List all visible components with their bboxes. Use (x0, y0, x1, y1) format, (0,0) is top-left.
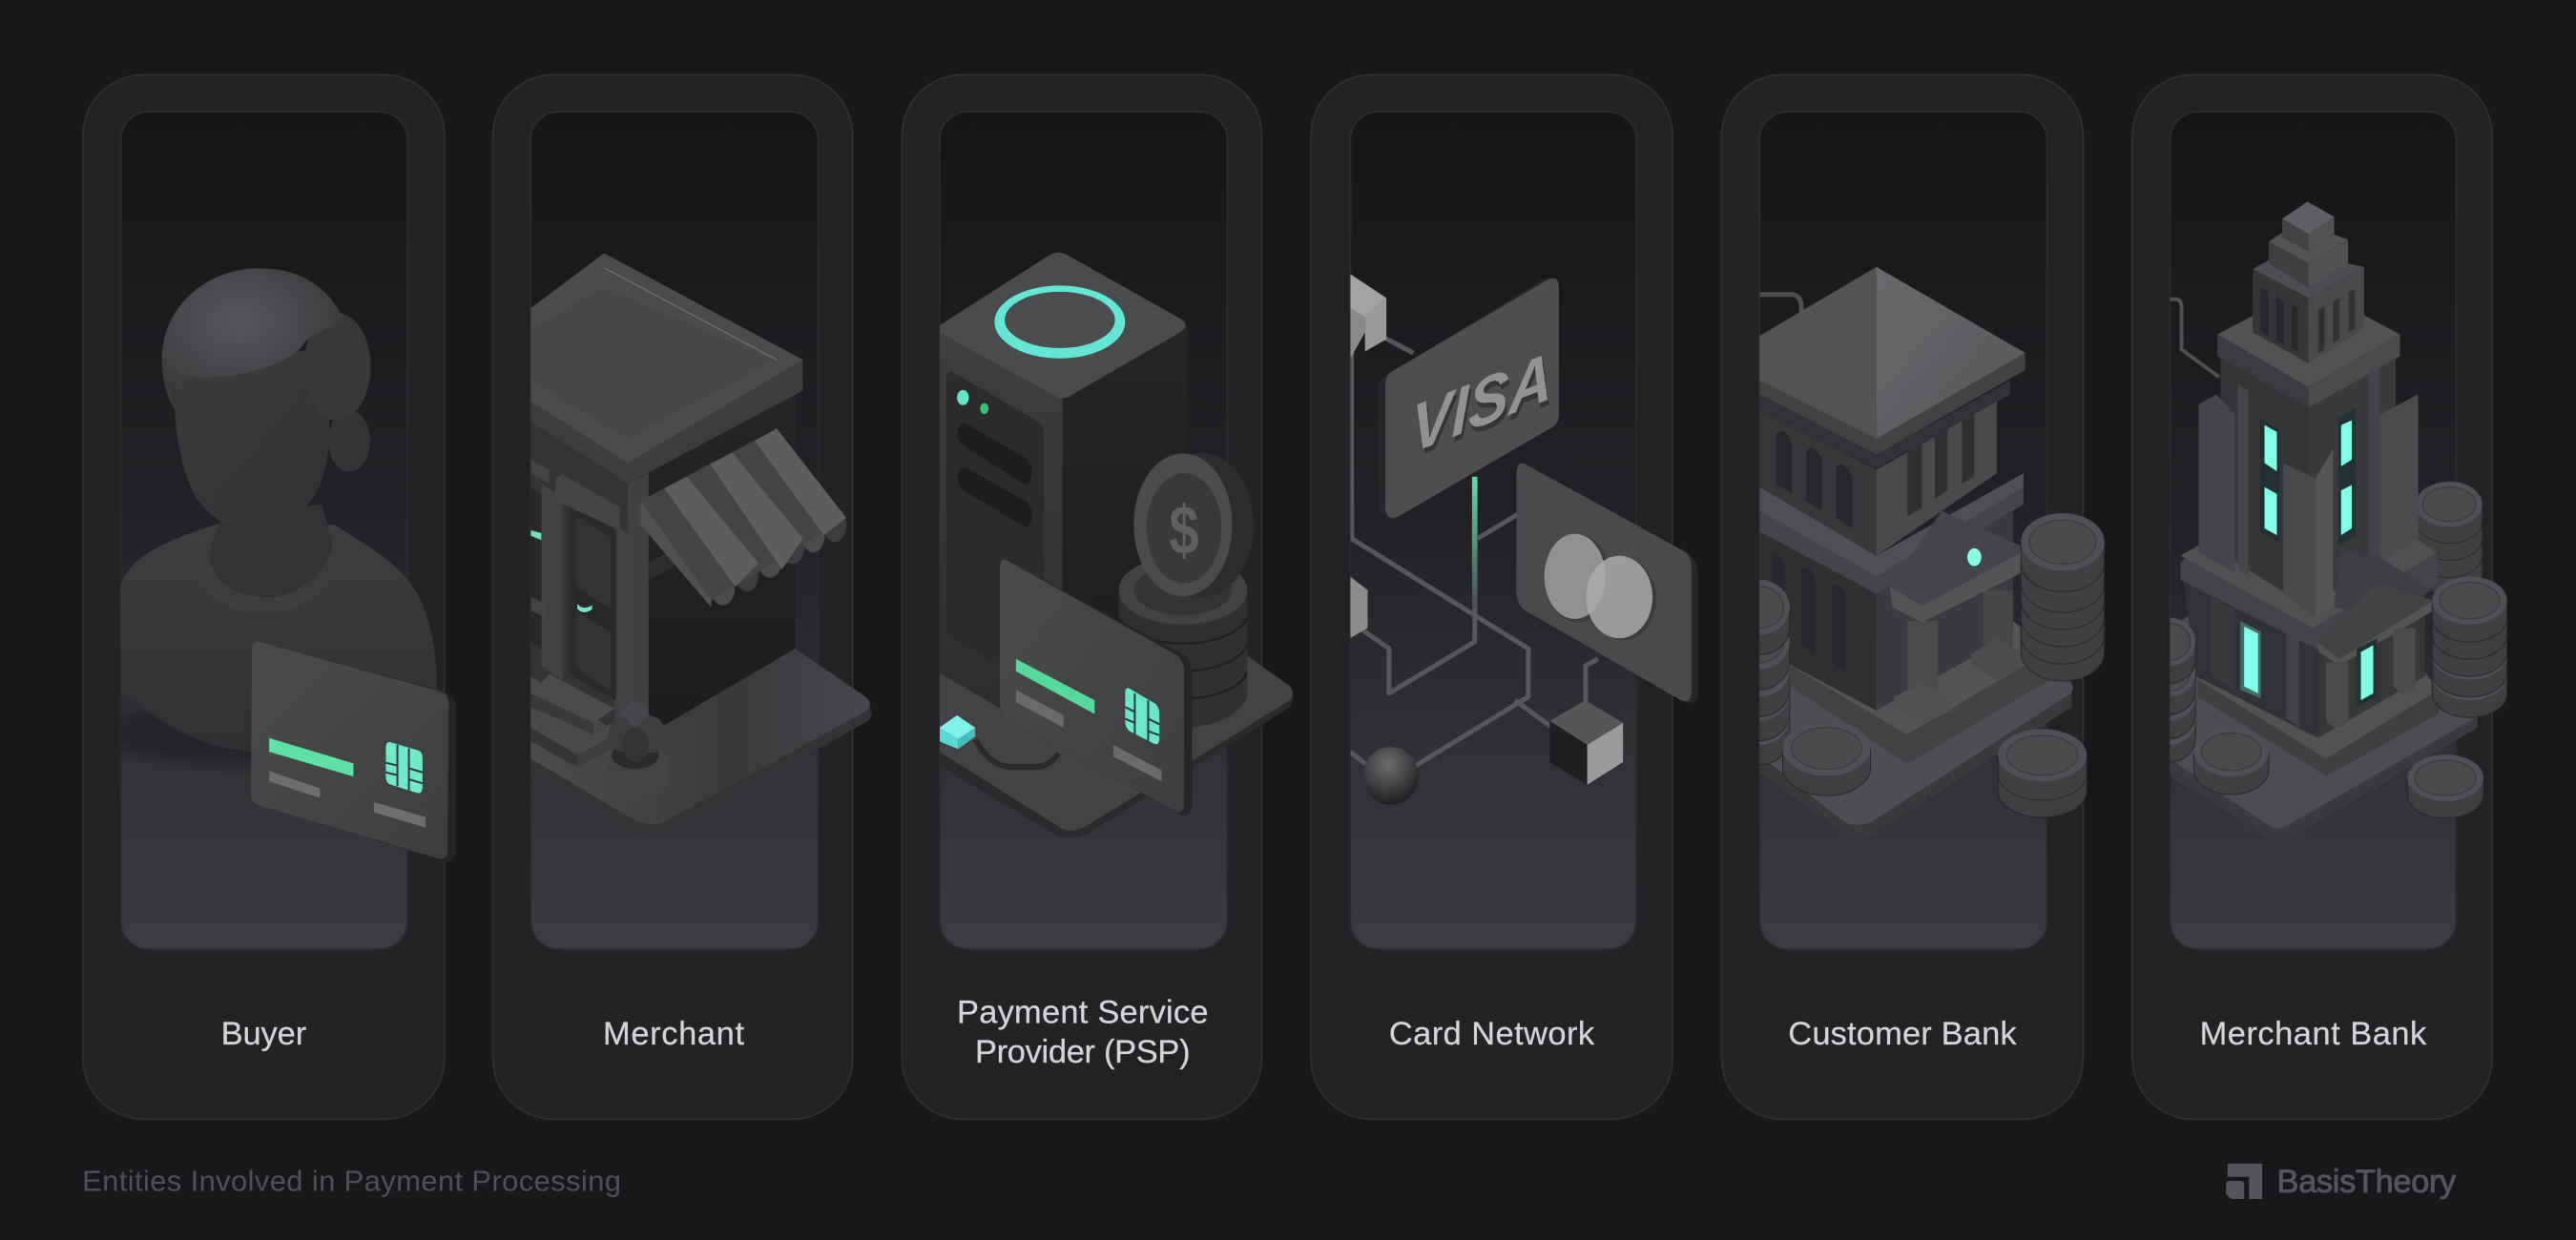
footer caption: Entities Involved in Payment Processing (82, 1164, 621, 1197)
illustration: merchant storefront (530, 253, 872, 837)
card frame: Merchant (493, 74, 853, 1119)
card frame: PSP (902, 74, 1261, 1119)
card frame: Buyer (83, 74, 445, 1119)
label: Card Network: Card Network (1389, 1016, 1595, 1052)
wordmark: BasisTheory (2277, 1164, 2457, 1200)
logo: Visa: VISA (1413, 341, 1555, 473)
card frame: Customer Bank (1722, 74, 2083, 1119)
label: Payment Service Provider (PSP): Payment Service (957, 995, 1208, 1031)
label: Buyer: Buyer (221, 1016, 306, 1052)
illustration: buyer bust with credit card (104, 268, 456, 861)
logo: Basis Theory (2226, 1164, 2457, 1200)
illustration: merchant bank tower (2144, 201, 2507, 840)
illustration well: Merchant (530, 112, 819, 949)
illustration: customer bank building (1730, 267, 2105, 838)
card frame: Card Network (1311, 74, 1672, 1119)
illustration well: Merchant Bank (2171, 112, 2456, 949)
icon: dollar sign: $ (1169, 492, 1199, 568)
panel: Card Network (1311, 74, 1698, 1119)
illustration: card network nodes (1350, 274, 1698, 805)
label: PSP second line: Provider (PSP) (975, 1034, 1191, 1070)
icon: Basis Theory mark (2226, 1164, 2262, 1199)
illustration well: Customer Bank (1759, 112, 2046, 949)
panel: Merchant (493, 74, 872, 1119)
card frame: Merchant Bank (2132, 74, 2492, 1119)
label: Merchant Bank: Merchant Bank (2200, 1016, 2427, 1052)
illustration well: PSP (940, 112, 1227, 949)
panel: Buyer (83, 74, 456, 1119)
panel: Merchant Bank (2132, 74, 2507, 1119)
panel: Payment Service Provider (902, 74, 1293, 1119)
panel: Customer Bank (1722, 74, 2105, 1119)
illustration well: Buyer (121, 112, 407, 949)
label: Merchant: Merchant (603, 1016, 744, 1052)
illustration well: Card Network (1350, 112, 1636, 949)
label: Customer Bank: Customer Bank (1788, 1016, 2017, 1052)
illustration: server, coins and card (940, 253, 1293, 838)
logo: Visa front: VISA (1411, 337, 1553, 468)
